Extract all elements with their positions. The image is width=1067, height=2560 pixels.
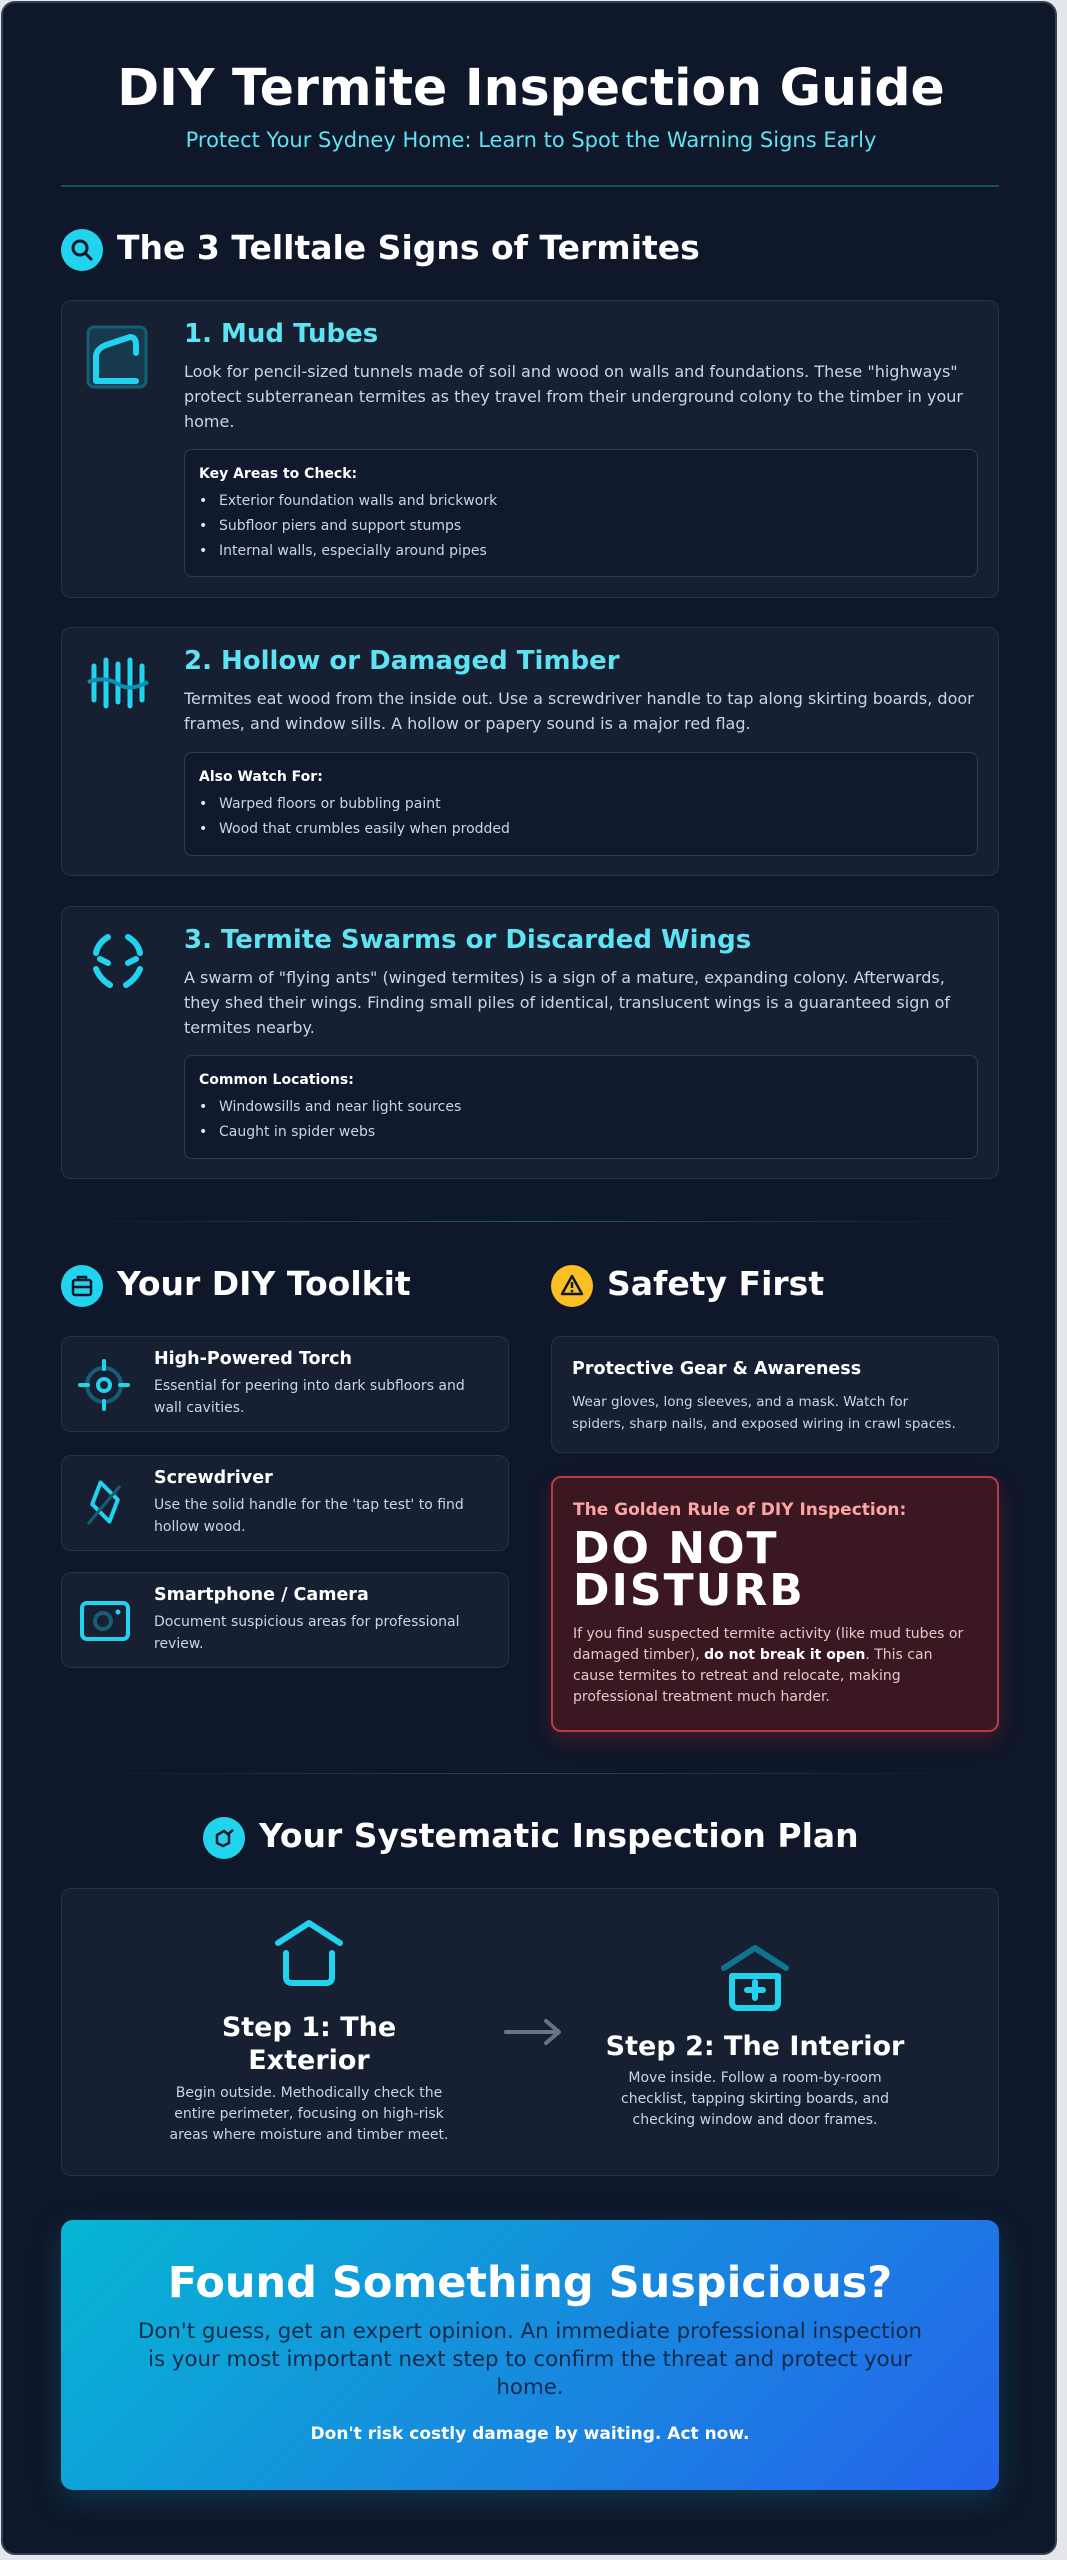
tool: torch bbox=[61, 1336, 509, 1432]
key areas box: Internal walls, especially around pipes bbox=[219, 543, 487, 559]
call to action bbox=[61, 2220, 999, 2490]
call to action: Don't guess, get an expert opinion. An immediate professional inspection bbox=[138, 2319, 922, 2344]
icon: screwdriver bbox=[87, 1480, 121, 1525]
tool: screwdriver: Use the solid handle for the 'tap test' to find hollow wood. bbox=[154, 1497, 464, 1535]
title: DIY Termite Inspection Guide bbox=[117, 58, 945, 117]
safety card: protective gear: Protective Gear & Awareness bbox=[572, 1359, 861, 1379]
key areas box: Key Areas to Check: bbox=[199, 466, 357, 482]
common locations box: Caught in spider webs bbox=[219, 1124, 375, 1140]
key areas box bbox=[184, 449, 978, 577]
step 1: Exterior bbox=[248, 2045, 370, 2076]
panel: mud tubes bbox=[61, 300, 999, 598]
heading: safety: Safety First bbox=[607, 1264, 824, 1303]
icon: house plus bbox=[721, 1945, 789, 2011]
panel: mud tubes: Look for pencil-sized tunnels made of soil and wood on walls and foundations. These "highways" protect subterranean termites as they travel from their underground colony to the timber in your home. bbox=[184, 362, 963, 431]
panel: mud tubes: 1. Mud Tubes bbox=[184, 319, 378, 349]
icon: mud tube bbox=[86, 326, 148, 388]
panel: swarms: 3. Termite Swarms or Discarded Wings bbox=[184, 925, 751, 955]
step 2 bbox=[606, 1945, 904, 2128]
panel: swarms: A swarm of "flying ants" (winged termites) is a sign of a mature, expanding colony. Afterwards, they shed their wings. Finding small piles of identical, translucent wings is a guaranteed sign of termites nearby. bbox=[184, 968, 950, 1037]
safety card: protective gear: spiders, sharp nails, and exposed wiring in crawl spaces. bbox=[572, 1416, 956, 1432]
icon: toolbox bbox=[61, 1265, 103, 1307]
subtitle: Protect Your Sydney Home: Learn to Spot the Warning Signs Early bbox=[186, 128, 876, 152]
call to action: home. bbox=[496, 2375, 564, 2400]
panel: hollow timber bbox=[61, 627, 999, 876]
callout: golden rule: If you find suspected termite activity (like mud tubes or damaged timber), do not break it open. This can cause termites to retreat and relocate, making professional treatment much harder. bbox=[573, 1626, 963, 1705]
step 1: Begin outside. Methodically check the entire perimeter, focusing on high-risk areas where moisture and timber meet. bbox=[170, 2085, 448, 2143]
panel: plan steps bbox=[61, 1888, 999, 2176]
also watch box: Wood that crumbles easily when prodded bbox=[219, 821, 510, 837]
call to action: Found Something Suspicious? bbox=[168, 2258, 892, 2308]
icon: warning bbox=[551, 1265, 593, 1307]
tool: camera: Smartphone / Camera bbox=[154, 1585, 369, 1605]
icon: magnifier bbox=[61, 229, 103, 271]
panel: swarms bbox=[61, 906, 999, 1179]
tool: torch: High-Powered Torch bbox=[154, 1349, 352, 1369]
heading: signs: The 3 Telltale Signs of Termites bbox=[117, 228, 700, 267]
safety card: protective gear: Wear gloves, long sleeves, and a mask. Watch for bbox=[572, 1394, 908, 1410]
heading: plan: Your Systematic Inspection Plan bbox=[259, 1816, 859, 1855]
tool: camera bbox=[61, 1572, 509, 1668]
tool: camera: Document suspicious areas for professional review. bbox=[154, 1614, 459, 1652]
callout: golden rule: DO NOT bbox=[573, 1523, 778, 1574]
key areas box: Exterior foundation walls and brickwork bbox=[219, 493, 497, 509]
common locations box: Common Locations: bbox=[199, 1072, 354, 1088]
call to action: Don't risk costly damage by waiting. Act now. bbox=[311, 2424, 749, 2444]
icon: house bbox=[275, 1920, 343, 1986]
also watch box: Warped floors or bubbling paint bbox=[219, 796, 441, 812]
callout: golden rule: The Golden Rule of DIY Inspection: bbox=[573, 1500, 906, 1520]
arrow bbox=[504, 2018, 562, 2046]
also watch box: Also Watch For: bbox=[199, 769, 323, 785]
key areas box: Subfloor piers and support stumps bbox=[219, 518, 461, 534]
heading: toolkit: Your DIY Toolkit bbox=[117, 1264, 411, 1303]
step 1: Step 1: The bbox=[222, 2012, 396, 2043]
icon: wings bbox=[93, 934, 143, 988]
common locations box: Windowsills and near light sources bbox=[219, 1099, 461, 1115]
callout: golden rule: DISTURB bbox=[573, 1565, 805, 1616]
panel: hollow timber: Termites eat wood from the inside out. Use a screwdriver handle to tap along skirting boards, door frames, and window sills. A hollow or papery sound is a major red flag. bbox=[184, 689, 974, 733]
icon: camera bbox=[80, 1601, 130, 1641]
callout: golden rule bbox=[551, 1476, 999, 1732]
icon: torch bbox=[78, 1359, 130, 1411]
icon: timber bbox=[87, 658, 149, 708]
step 2: Step 2: The Interior bbox=[606, 2031, 904, 2062]
common locations box bbox=[184, 1055, 978, 1159]
safety card: protective gear bbox=[551, 1336, 999, 1453]
step 1 bbox=[170, 1920, 448, 2143]
step 2: Move inside. Follow a room-by-room checklist, tapping skirting boards, and checking window and door frames. bbox=[621, 2070, 889, 2128]
call to action: is your most important next step to confirm the threat and protect your bbox=[148, 2347, 912, 2372]
panel: hollow timber: 2. Hollow or Damaged Timber bbox=[184, 646, 620, 676]
tool: screwdriver bbox=[61, 1455, 509, 1551]
tool: torch: Essential for peering into dark subfloors and wall cavities. bbox=[154, 1378, 465, 1416]
tool: screwdriver: Screwdriver bbox=[154, 1468, 273, 1488]
icon: plan bbox=[203, 1817, 245, 1859]
also watch box bbox=[184, 752, 978, 856]
